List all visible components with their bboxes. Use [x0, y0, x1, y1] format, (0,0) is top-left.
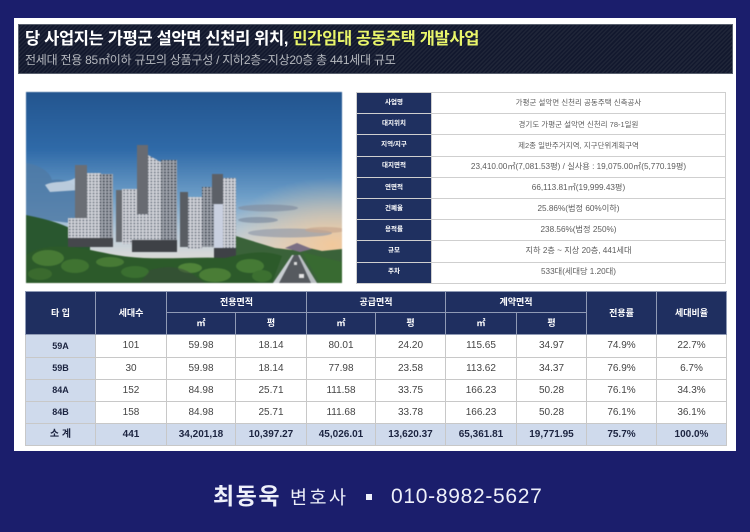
panel: project overview table: 사업명: [385, 99, 403, 106]
building 1: [68, 165, 113, 247]
foreground trees: [26, 246, 342, 283]
panel: project overview table: 533대(세대당 1.20대): [541, 267, 616, 276]
panel: unit type area table: 22.7%: [677, 340, 706, 351]
panel: unit type area table: 소 계: [50, 428, 71, 440]
panel: unit type area table: 111.58: [326, 384, 356, 396]
panel: project overview table: 25.86%(법정 60%이하): [537, 204, 620, 213]
panel: unit type area table: 77.98: [328, 362, 354, 374]
panel: project overview table: 주차: [388, 268, 400, 275]
panel: unit type area table: 50.28: [539, 384, 564, 396]
panel: unit type area table: 158: [123, 406, 139, 418]
panel: unit type area table: 59.98: [188, 362, 214, 374]
panel: unit type area table: 59B: [52, 363, 69, 373]
panel: unit type area table: 50.28: [539, 406, 564, 418]
panel: unit type area table: 24.20: [398, 340, 423, 351]
panel: unit type area table: 10,397.27: [249, 428, 293, 440]
panel: unit type area table: 6.7%: [680, 362, 703, 374]
panel: unit type area table: 33.75: [398, 384, 423, 396]
panel: unit type area table: 100.0%: [675, 428, 708, 440]
panel: unit type area table: 76.1%: [607, 384, 636, 396]
panel: unit type area table: 45,026.01: [319, 428, 363, 440]
panel: unit type area table: 111.68: [326, 406, 356, 418]
panel: unit type area table: 18.14: [258, 362, 284, 374]
panel: unit type area table: 34.37: [539, 362, 564, 374]
footer contact line: 010-8982-5627: [391, 485, 543, 508]
panel: unit type area table: 세대수: [119, 308, 143, 318]
panel: unit type area table: 84.98: [188, 384, 214, 396]
panel: unit type area table: ㎡: [336, 318, 346, 328]
panel: unit type area table: 평: [406, 318, 415, 328]
panel: unit type area table: ㎡: [476, 318, 486, 328]
panel: project overview table: 대지위치: [382, 120, 406, 127]
building 4: [180, 192, 202, 249]
panel: unit type area table: 13,620.37: [388, 428, 433, 440]
panel: unit type area table: 세대비율: [675, 308, 708, 318]
panel: unit type area table: 계약면적: [499, 296, 533, 306]
panel: unit type area table: 34.97: [539, 340, 564, 351]
illustration: apartment complex rendering: [25, 91, 343, 284]
building 5: [202, 174, 236, 258]
road: [273, 255, 317, 283]
panel: project overview table: 지하 2층 ~ 지상 20층, 441세대: [525, 246, 632, 255]
heading bar: [18, 24, 733, 74]
panel: project overview table: 지역/지구: [381, 141, 407, 148]
panel: unit type area table: 평: [547, 318, 556, 328]
panel: unit type area table: 166.23: [466, 406, 496, 418]
panel: project overview table: 건폐율: [385, 205, 403, 212]
panel: unit type area table: 30: [125, 362, 137, 374]
panel: unit type area table: ㎡: [196, 318, 206, 328]
panel: unit type area table: 25.71: [258, 406, 284, 418]
building 2: [116, 189, 137, 244]
panel: project overview table: 경기도 가평군 설악면 신천리 78-1일원: [519, 120, 638, 129]
panel: unit type area table: 84B: [52, 407, 69, 417]
panel: unit type area table: 34,201,18: [179, 428, 223, 440]
panel: unit type area table: 74.9%: [607, 340, 636, 351]
panel: unit type area table: 23.58: [398, 362, 423, 374]
panel: unit type area table: 115.65: [466, 340, 496, 351]
panel: unit type area table: 19,771.95: [529, 428, 574, 440]
panel: unit type area table: 전용률: [609, 308, 634, 318]
panel: unit type area table: 34.3%: [677, 384, 706, 396]
panel: unit type area table: 59.98: [188, 340, 214, 351]
panel: unit type area table: [25, 291, 727, 446]
panel: project overview table: 238.56%(법정 250%): [540, 225, 617, 234]
footer contact line: [213, 483, 543, 509]
panel: project overview table: 가평군 설악면 신천리 공동주택 신축공사: [516, 98, 641, 107]
panel: unit type area table: 36.1%: [677, 406, 706, 418]
panel: unit type area table: 65,361.81: [459, 428, 503, 440]
panel: unit type area table: 25.71: [258, 384, 284, 396]
panel: unit type area table: 76.9%: [607, 362, 636, 374]
hills: [26, 215, 342, 283]
panel: project overview table: 용적률: [385, 226, 403, 233]
panel: unit type area table: 166.23: [466, 384, 496, 396]
panel: unit type area table: 84.98: [188, 406, 214, 418]
panel: unit type area table: 타 입: [51, 308, 70, 318]
panel: unit type area table: 152: [123, 384, 139, 396]
panel: unit type area table: 101: [123, 340, 139, 351]
panel: project overview table: 제2종 일반주거지역, 지구단위계획구역: [518, 141, 639, 150]
panel: project overview table: 대지면적: [382, 162, 406, 169]
panel: unit type area table: 33.78: [398, 406, 423, 418]
panel: project overview table: 연면적: [385, 184, 403, 191]
panel: unit type area table: 441: [123, 428, 139, 440]
panel: unit type area table: 84A: [52, 385, 69, 395]
footer contact line: 최동욱: [213, 483, 281, 509]
panel: project overview table: [356, 92, 726, 284]
panel: unit type area table: 113.62: [466, 362, 496, 374]
footer contact line: 변호사: [290, 487, 349, 508]
building 3: [132, 145, 177, 252]
panel: unit type area table: 전용면적: [220, 296, 253, 306]
subtitle: 전세대 전용 85㎡이하 규모의 상품구성 / 지하2층~지상20층 총 441세대 규모: [25, 53, 396, 67]
panel: project overview table: 규모: [388, 247, 400, 254]
panel: white content card: [14, 18, 736, 451]
title: 당 사업지는 가평군 설악면 신천리 위치, 민간임대 공동주택 개발사업: [25, 30, 479, 48]
panel: unit type area table: 59A: [52, 340, 69, 350]
panel: unit type area table: 공급면적: [359, 296, 393, 306]
panel: unit type area table: 평: [267, 318, 275, 328]
sky: [26, 92, 342, 283]
panel: unit type area table: 75.7%: [607, 428, 636, 440]
panel: unit type area table: 80.01: [328, 340, 354, 351]
panel: unit type area table: 18.14: [258, 340, 284, 351]
panel: project overview table: 66,113.81㎡(19,999.43평): [532, 183, 625, 192]
clouds: [26, 163, 345, 238]
panel: project overview table: 23,410.00㎡(7,081.53평) / 실사용 : 19,075.00㎡(5,770.19평): [471, 162, 686, 171]
panel: unit type area table: 76.1%: [607, 406, 636, 418]
